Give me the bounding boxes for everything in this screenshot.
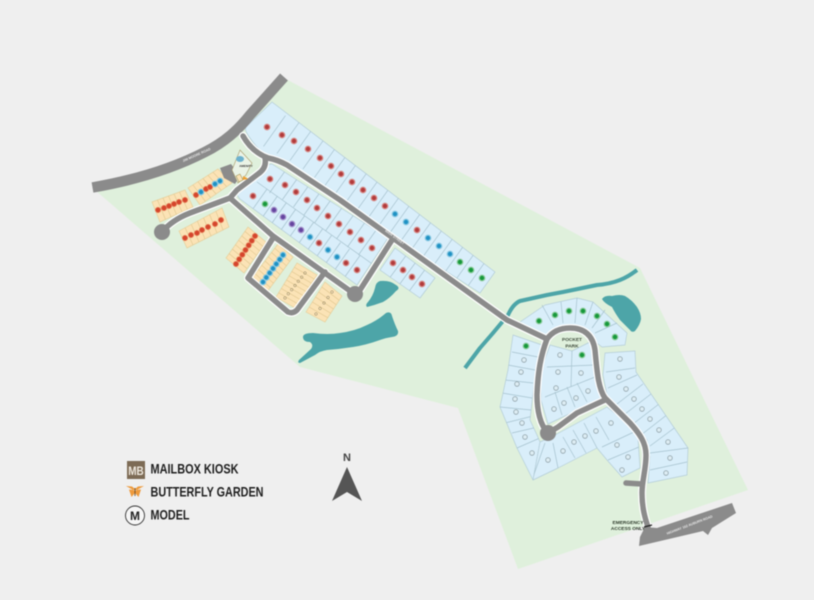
townhome block B: [188, 169, 232, 205]
road label: main street: MAIN STREET: [384, 229, 406, 246]
lots: south block: [532, 407, 640, 480]
road label: Jim Moore Road: JIM MOORE ROAD: [182, 147, 212, 163]
lot dots: northern row: [264, 124, 485, 281]
townhome block G: [306, 282, 342, 322]
amenity center: [232, 150, 253, 183]
townhome block C: [179, 208, 229, 248]
stream: [465, 270, 637, 368]
icon: mailbox kiosk: MB: [128, 464, 144, 478]
pond: east pond: [602, 295, 641, 332]
icon: model: M: [130, 509, 140, 523]
legend label: butterfly garden: BUTTERFLY GARDEN: [150, 484, 264, 500]
lot dots: small eastern block: [390, 260, 425, 287]
amenity center: AMENITY: [239, 164, 253, 168]
road label: Highway 162: HIGHWAY 162 AUBURN ROAD: [666, 514, 714, 536]
townhome block E: [252, 244, 293, 292]
emergency gate marker: [644, 525, 652, 527]
lots: east block: [603, 351, 688, 483]
lots: small eastern block: [380, 248, 435, 298]
road: Jim Moore Road: [92, 77, 284, 188]
north arrow: N: [343, 452, 351, 464]
lots: west block: [500, 335, 542, 480]
cul-de-sacs and parking: [154, 164, 556, 441]
lots: pocket park arc: [520, 298, 627, 347]
highway: [639, 503, 736, 546]
south lot markers: [513, 353, 672, 475]
legend: [126, 460, 264, 525]
legend label: model: MODEL: [150, 506, 190, 522]
lots: inner loop block: [541, 342, 603, 424]
lot dots: central lower row: [250, 193, 360, 273]
lots: central double row: [238, 164, 388, 285]
pond: large west pond: [298, 312, 398, 363]
legend label: mailbox kiosk: MAILBOX KIOSK: [150, 460, 238, 476]
label: emergency access: ACCESS ONLY: [611, 526, 646, 532]
label: pocket park: PARK: [565, 344, 579, 350]
north arrow: [332, 452, 362, 501]
icon: butterfly: [126, 486, 144, 497]
road network: [162, 136, 648, 527]
road network casing: [162, 136, 648, 527]
townhome open markers: [284, 272, 333, 315]
pond: small pond by cul-de-sac: [366, 281, 398, 307]
townhome block A: [152, 190, 193, 222]
lot dots: pocket park green: [523, 308, 618, 358]
lots: northern row: [246, 102, 495, 293]
label: emergency access: EMERGENCY: [613, 521, 643, 526]
townhome dots: [155, 178, 286, 285]
label: pocket park: POCKET: [562, 338, 582, 343]
townhome block F: [276, 263, 317, 308]
lot dots: central upper row: [267, 176, 375, 251]
site parcel: [95, 78, 748, 569]
townhome block D: [226, 227, 266, 273]
